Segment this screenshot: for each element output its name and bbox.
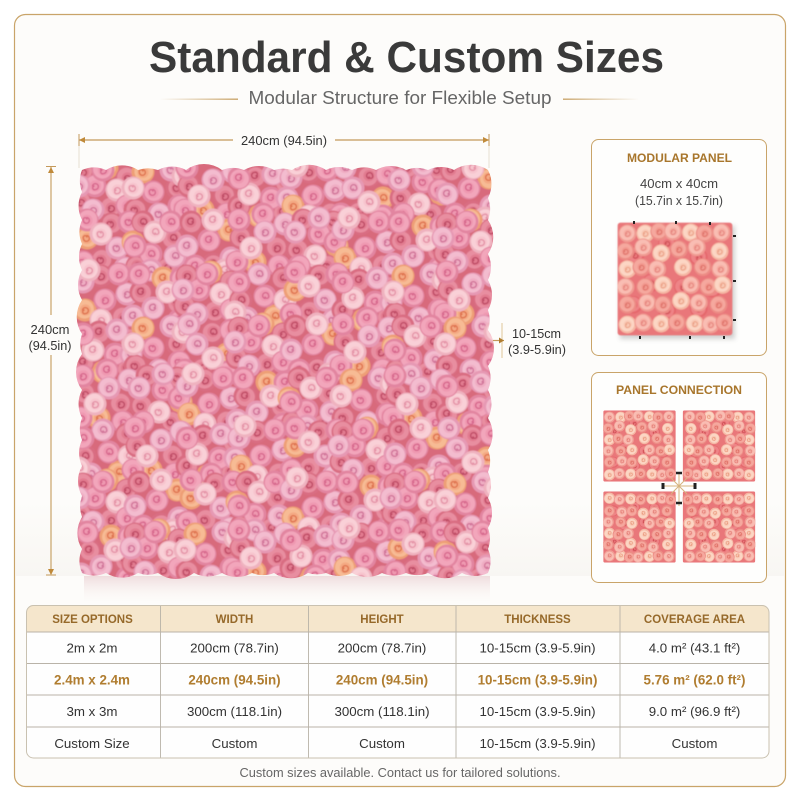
size table — [26, 605, 769, 758]
row: 2.4m x 2.4m highlighted: 240cm (94.5in) — [336, 672, 428, 688]
row: 2.4m x 2.4m highlighted: 5.76 m² (62.0 ft²) — [644, 672, 745, 688]
header row: SIZE OPTIONS — [52, 614, 133, 626]
row: 2.4m x 2.4m highlighted: 10-15cm (3.9-5.9in) — [478, 672, 597, 688]
row: 3m x 3m: 3m x 3m — [67, 704, 117, 719]
panel size text: 40cm x 40cm — [640, 176, 718, 191]
footer note: Custom sizes available. Contact us for tailored solutions. — [240, 766, 560, 780]
row: 2m x 2m: 2m x 2m — [67, 640, 117, 656]
panel: panel connection — [592, 372, 766, 582]
row: 3m x 3m: 300cm (118.1in) — [334, 704, 430, 719]
header row: WIDTH — [216, 614, 253, 626]
title: Standard & Custom Sizes — [149, 33, 664, 82]
row: 3m x 3m: 9.0 m² (96.9 ft²) — [649, 704, 740, 719]
dimension: top width: 240cm (94.5in) — [241, 133, 327, 148]
header row: THICKNESS — [504, 614, 571, 626]
panel size text — [635, 176, 723, 208]
dimension: wall thickness — [490, 323, 566, 358]
row: 2.4m x 2.4m highlighted: 2.4m x 2.4m — [54, 672, 130, 688]
row: 2.4m x 2.4m highlighted — [54, 672, 745, 688]
flower wall — [68, 154, 506, 592]
dimension: wall thickness: (3.9-5.9in) — [508, 342, 566, 357]
row: custom size: Custom — [359, 736, 405, 751]
row: 2m x 2m: 4.0 m² (43.1 ft²) — [649, 640, 740, 656]
row: 3m x 3m — [67, 704, 740, 719]
connector cross — [663, 473, 695, 506]
row: 2m x 2m: 10-15cm (3.9-5.9in) — [479, 640, 596, 656]
dimension: left height: (94.5in) — [28, 338, 72, 353]
dimension: wall thickness: 10-15cm — [512, 326, 561, 341]
row: 3m x 3m: 300cm (118.1in) — [187, 704, 282, 719]
row: 2.4m x 2.4m highlighted: 240cm (94.5in) — [188, 672, 281, 688]
table body — [26, 632, 769, 758]
wall backdrop shade — [16, 500, 784, 576]
row: custom size: Custom — [672, 736, 717, 751]
panel: modular panel — [592, 140, 766, 356]
table header band — [26, 605, 769, 632]
dimension: left height — [28, 166, 72, 575]
header row — [52, 614, 745, 626]
header row: COVERAGE AREA — [644, 614, 745, 626]
row: 2m x 2m — [67, 640, 740, 656]
panel heading: panel connection: PANEL CONNECTION — [616, 383, 742, 397]
dimension: left height: 240cm — [30, 322, 70, 337]
subtitle with side rules: Modular Structure for Flexible Setup — [248, 87, 552, 108]
header row: HEIGHT — [360, 614, 404, 626]
row: 2m x 2m: 200cm (78.7in) — [190, 640, 279, 656]
modular panel flower photo — [617, 221, 736, 339]
row: custom size — [54, 736, 717, 751]
row: 2m x 2m: 200cm (78.7in) — [338, 640, 426, 656]
row: custom size: Custom — [212, 736, 257, 751]
floor reflection — [84, 576, 490, 604]
panel size text: (15.7in x 15.7in) — [635, 193, 723, 208]
dimension: top width — [79, 133, 489, 168]
row: custom size: Custom Size — [54, 736, 130, 751]
four connected flower panels — [603, 410, 756, 563]
row: custom size: 10-15cm (3.9-5.9in) — [479, 736, 596, 751]
panel heading: modular panel: MODULAR PANEL — [627, 151, 732, 165]
row: 3m x 3m: 10-15cm (3.9-5.9in) — [479, 704, 596, 719]
